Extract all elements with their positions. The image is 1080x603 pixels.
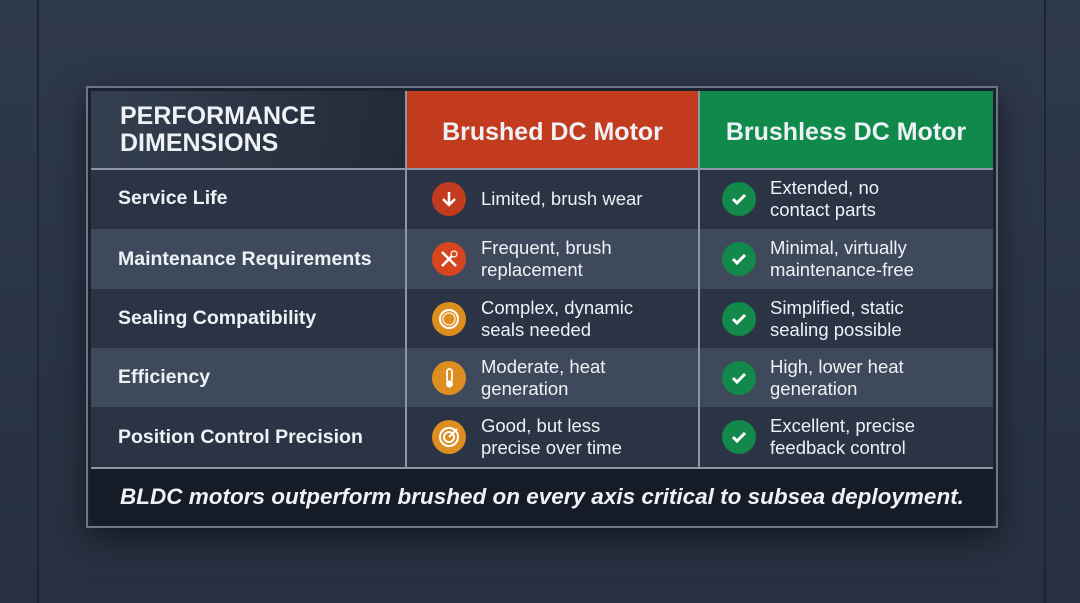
icon: seal ring	[432, 302, 466, 336]
panel: comparison table: Sealing Compatibility	[118, 307, 316, 329]
brushed cell texts: Limited, brush wear	[481, 188, 642, 208]
panel: comparison table: Position Control Precision	[118, 426, 363, 448]
panel: comparison table: Good, but less	[481, 415, 600, 436]
icon: wrench	[432, 242, 466, 276]
header: performance dimensions: PERFORMANCE	[120, 102, 316, 130]
header: performance dimensions: DIMENSIONS	[120, 128, 278, 156]
panel: comparison table: Efficiency	[118, 366, 210, 388]
header: performance dimensions	[91, 91, 406, 168]
icons: green checks	[722, 182, 756, 454]
header: brushed DC motor: Brushed DC Motor	[442, 118, 663, 146]
panel: comparison table	[86, 86, 998, 528]
panel: comparison table: Maintenance Requirements	[118, 248, 372, 270]
header: brushless DC motor	[699, 94, 993, 171]
header: brushless DC motor: Brushless DC Motor	[726, 118, 966, 146]
panel: comparison table: generation	[481, 378, 568, 398]
panel: comparison table: Simplified, static	[770, 296, 904, 318]
icon: down arrow	[432, 182, 466, 216]
brushless cell texts: Extended, no	[770, 176, 879, 198]
panel: comparison table: Moderate, heat	[481, 356, 605, 376]
panel: comparison table: feedback control	[770, 437, 906, 458]
panel: comparison table: maintenance-free	[770, 259, 914, 280]
brushless cell texts	[770, 176, 879, 220]
row labels: Service Life	[118, 187, 227, 209]
panel: comparison table: seals needed	[481, 318, 591, 340]
icon: target	[432, 420, 466, 454]
panel: comparison table: Complex, dynamic	[481, 296, 633, 318]
panel: comparison table: Frequent, brush	[481, 237, 612, 258]
brushless cell texts: contact parts	[770, 198, 876, 220]
footer: conclusion	[91, 469, 993, 524]
panel: comparison table: Minimal, virtually	[770, 237, 907, 258]
panel: comparison table: replacement	[481, 259, 583, 280]
header: brushed DC motor	[406, 94, 699, 171]
footer: conclusion: BLDC motors outperform brushed on every axis critical to subsea deployment.	[120, 484, 964, 508]
panel: comparison table: sealing possible	[770, 318, 902, 340]
panel: comparison table: High, lower heat	[770, 356, 904, 376]
panel: comparison table: precise over time	[481, 437, 622, 458]
panel: comparison table: Excellent, precise	[770, 415, 915, 436]
panel: comparison table: generation	[770, 378, 857, 398]
icon: thermometer	[432, 361, 466, 395]
